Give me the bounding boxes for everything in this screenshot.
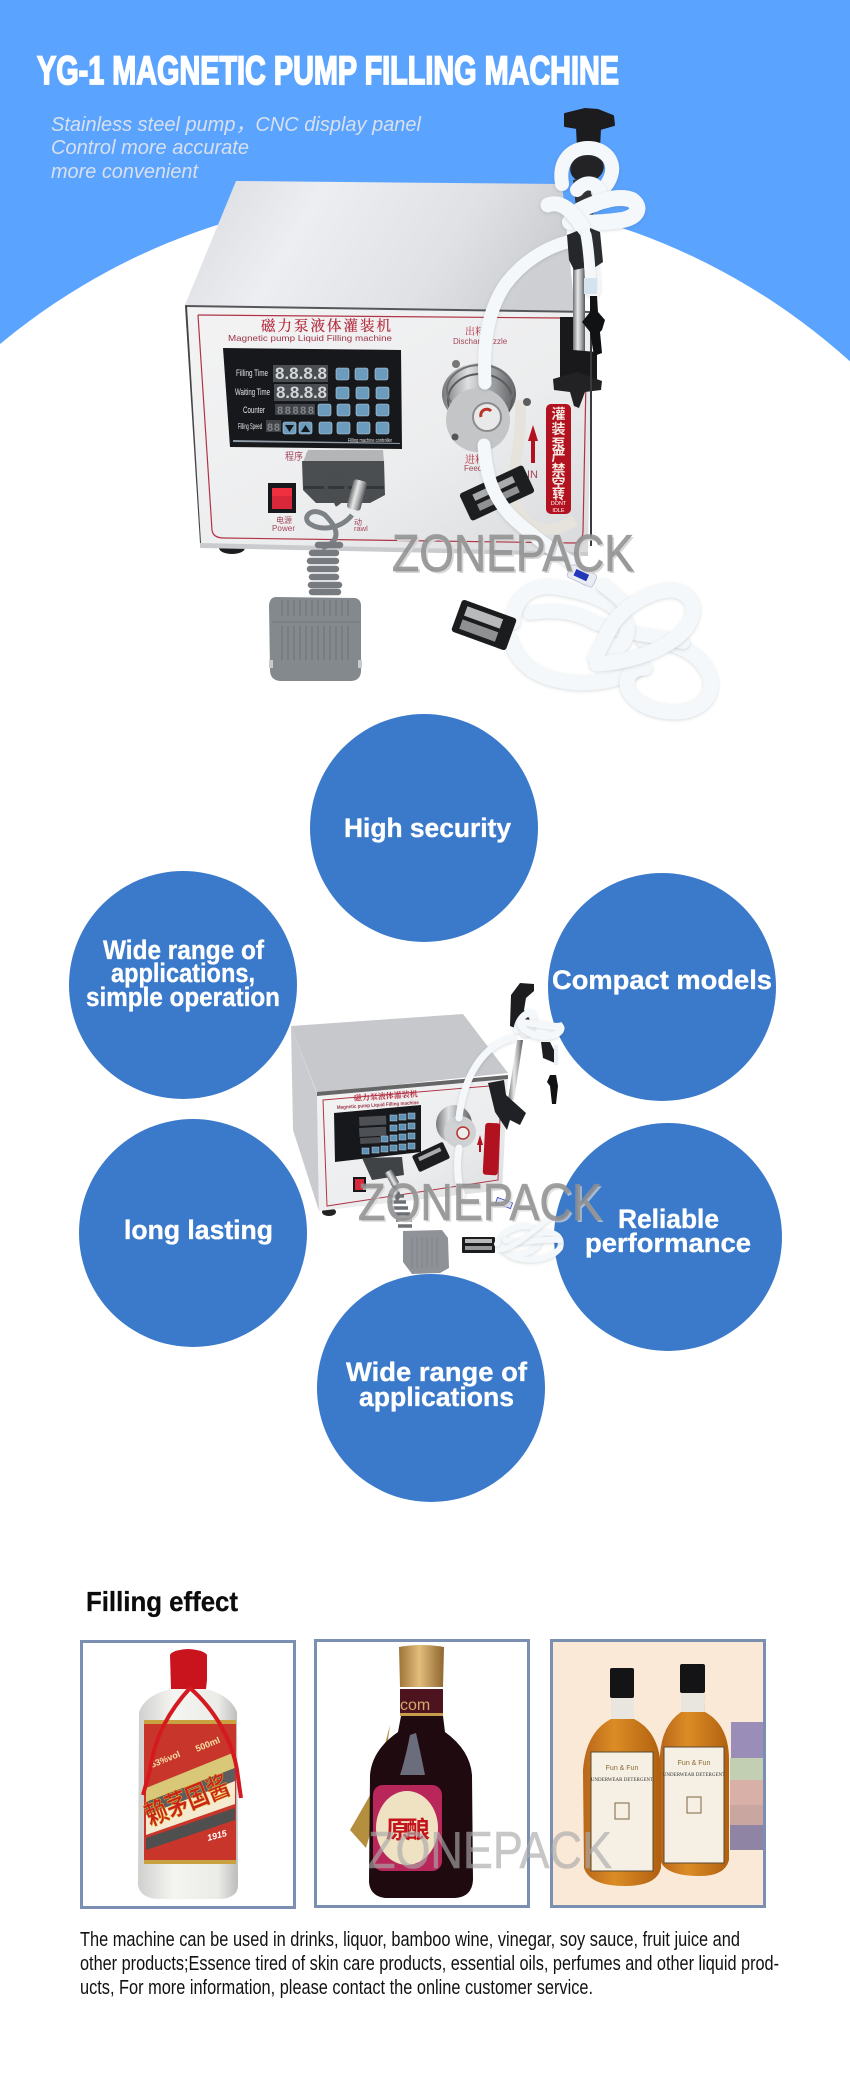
bottle label [141,1720,236,1864]
control panel: Filling Time [236,368,268,379]
small connector [495,1197,513,1209]
photo frame: liquor bottle [82,1642,294,1908]
small machine heading [337,1089,419,1111]
red warning label [546,404,571,514]
small machine side [291,1026,319,1211]
feature circle: compact models: Compact models [552,965,772,995]
red cap [170,1649,207,1689]
control panel: Filling machine controller [348,438,392,444]
machine front face [185,305,592,556]
small pump head [436,1105,476,1148]
description text block [80,1929,779,1999]
description text block: ucts, For more information, please contact the online customer service. [80,1977,593,1999]
control panel: Waiting Time [235,387,270,398]
power switch: 电源 [276,515,292,525]
connector and coiled cable [307,476,368,592]
photo frame: soy sauce bottle [316,1640,528,1906]
bottle label: 赖茅国酱 [141,1770,234,1832]
foot pedal [269,597,362,681]
small machine top [291,1014,508,1093]
control panel: Filling Speed [238,422,262,431]
small tube [458,1013,561,1195]
title: YG-1 MAGNETIC PUMP FILLING MACHINE [37,49,619,93]
small foot pedal [403,1230,449,1274]
heading: filling effect: Filling effect [86,1586,238,1617]
machine heading text: 出料 [465,325,485,338]
watermark 3: ZONEPACK [368,1822,612,1880]
machine foot [219,542,245,554]
red warning label: IDLE [552,508,565,514]
red warning label: 严 [552,448,566,464]
small upper pedal [362,1157,404,1180]
subtitle text block [51,114,422,183]
feature circle: wide range of applications [317,1274,545,1502]
black tube clamp [567,228,603,286]
red warning label: 转 [552,487,565,502]
feature circle: long lasting: long lasting [124,1215,273,1245]
connector and coiled cable: 动 [354,517,362,527]
machine heading text [228,317,508,473]
machine heading text: Discharg [453,337,485,346]
small panel filter [412,1142,450,1172]
left bottle [583,1668,661,1886]
feature circle: high security: High security [344,813,511,843]
control panel: 8.8.8.8 [275,364,327,383]
subtitle text block: Control more accurate [51,137,249,159]
dark bottle body [369,1716,473,1898]
red warning label: 装 [552,421,566,437]
machine heading text: zzle [493,337,508,346]
red warning label: 灌 [552,406,566,422]
bottle label: 1915 [206,1828,229,1843]
small machine foot [322,1208,336,1216]
coiled tube [510,585,711,712]
top knob [565,109,614,245]
feature circle: compact models [548,873,776,1101]
feature circle: reliable performance: performance [585,1228,751,1258]
subtitle text block: more convenient [51,161,199,183]
red ribbon [143,1688,241,1798]
small connector plug [385,1169,399,1187]
right bottle: Fun & Fun [678,1760,710,1767]
small suction filter [462,1237,495,1253]
red warning label: 泵 [552,436,566,452]
feed tube [484,445,572,563]
left bottle: Fun & Fun [606,1765,638,1772]
small cable [388,1183,412,1226]
machine heading text: Magnetic pump Liquid Filling machine [228,333,392,343]
small clamp and nozzle [541,1042,558,1104]
central small machine illustration [291,983,561,1274]
photo frame: detergent bottles [552,1640,764,1906]
nozzle [582,278,605,356]
bottle label: 500ml [194,1735,221,1754]
watermark 2: ZONEPACK [358,1174,602,1232]
machine heading text: Feed [464,464,482,473]
left bottle: UNDERWEAR DETERGENT [591,1778,653,1783]
round pink label [373,1785,442,1871]
small coil [497,1215,561,1260]
suction filter [451,599,517,651]
control panel: 88 [267,422,280,434]
small post and bracket [488,983,534,1130]
small machine heading: 磁力泵液体灌装机 [353,1089,418,1103]
gold cap [399,1645,444,1687]
magnetic pump head [442,360,531,452]
panel buttons [283,368,389,434]
power switch: Power [272,524,295,533]
feature circle: wide range simple operation [69,871,297,1099]
machine heading text: 进料 [465,453,485,466]
feature circle: wide range of applications: applications [359,1382,514,1412]
power switch [268,483,296,533]
upper foot pedal seen behind [302,450,385,503]
small red label and arrow [477,1123,500,1175]
feature circle: reliable performance: Reliable [618,1204,719,1234]
connector and coiled cable: rawl [354,524,368,533]
right bottle: UNDERWEAR DETERGENT [663,1773,725,1778]
feature circle: reliable performance [554,1123,782,1351]
neck band [400,1689,443,1716]
feature circle: wide range simple operation: applications, [111,958,255,988]
red warning label: 空 [552,475,566,491]
machine heading text: 磁力泵液体灌装机 [261,317,392,335]
watermark 2: ZONEPACK [360,1176,604,1234]
bottle label: 53%vol [149,1749,182,1770]
towels and lavender [730,1722,763,1850]
control panel: 88888 [277,405,314,417]
small machine heading: Magnetic pump Liquid Filling machine [337,1100,419,1111]
neck band: com [400,1697,430,1714]
feature circle: wide range simple operation: simple operation [86,982,280,1012]
hanging tag [350,1725,390,1848]
feature circle: long lasting [79,1119,307,1347]
round pink label: 原酿 [386,1817,430,1844]
feature circle: wide range of applications: Wide range of [346,1357,528,1387]
red warning label: 禁 [552,462,566,478]
IN arrow: IN [527,469,538,481]
vertical post [573,262,585,362]
IN arrow [527,425,538,481]
feature circle: wide range simple operation: Wide range of [103,935,265,965]
header background [0,0,850,1492]
procedure label: 程序 Procedure [285,450,347,463]
small control panel [334,1105,421,1162]
watermark 1: ZONEPACK [394,527,636,585]
dispensing tubes [485,148,637,383]
white liquor bottle [138,1689,238,1899]
watermark 1: ZONEPACK [392,525,634,583]
feature circle: high security [310,714,538,942]
subtitle text block: Stainless steel pump，CNC display panel [51,114,422,136]
control panel [223,348,402,449]
main machine illustration [185,109,711,712]
control panel: 8.8.8.8 [276,383,327,402]
tube connector [566,564,598,588]
right bracket and lower knob [553,316,602,546]
right bottle [660,1664,729,1876]
small machine front [317,1075,508,1211]
small power switch [353,1177,366,1192]
control panel: Counter [243,405,265,416]
machine top face [185,181,575,311]
red warning label: DONT [551,501,567,507]
faded reflection of tube on panel [514,400,575,529]
panel filter [459,465,535,521]
